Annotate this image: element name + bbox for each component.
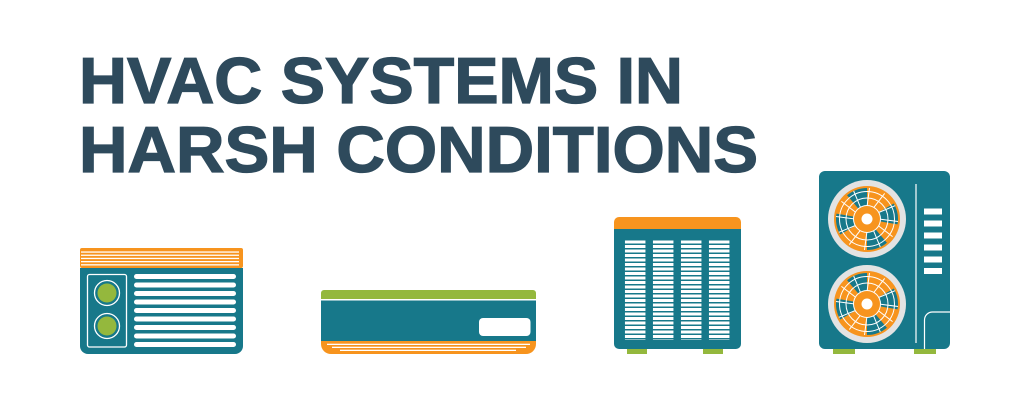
title: HARSH CONDITIONS bbox=[79, 113, 758, 186]
icon: condenser cabinet bbox=[614, 217, 741, 354]
icon: wall split unit bbox=[321, 290, 536, 354]
icon: upper fan bbox=[828, 180, 906, 258]
title: HVAC SYSTEMS IN bbox=[79, 44, 683, 117]
icon: outdoor unit with two fans bbox=[819, 171, 950, 354]
title bbox=[79, 44, 758, 186]
icon: lower fan bbox=[828, 265, 906, 343]
icon: window air conditioner bbox=[80, 248, 243, 354]
